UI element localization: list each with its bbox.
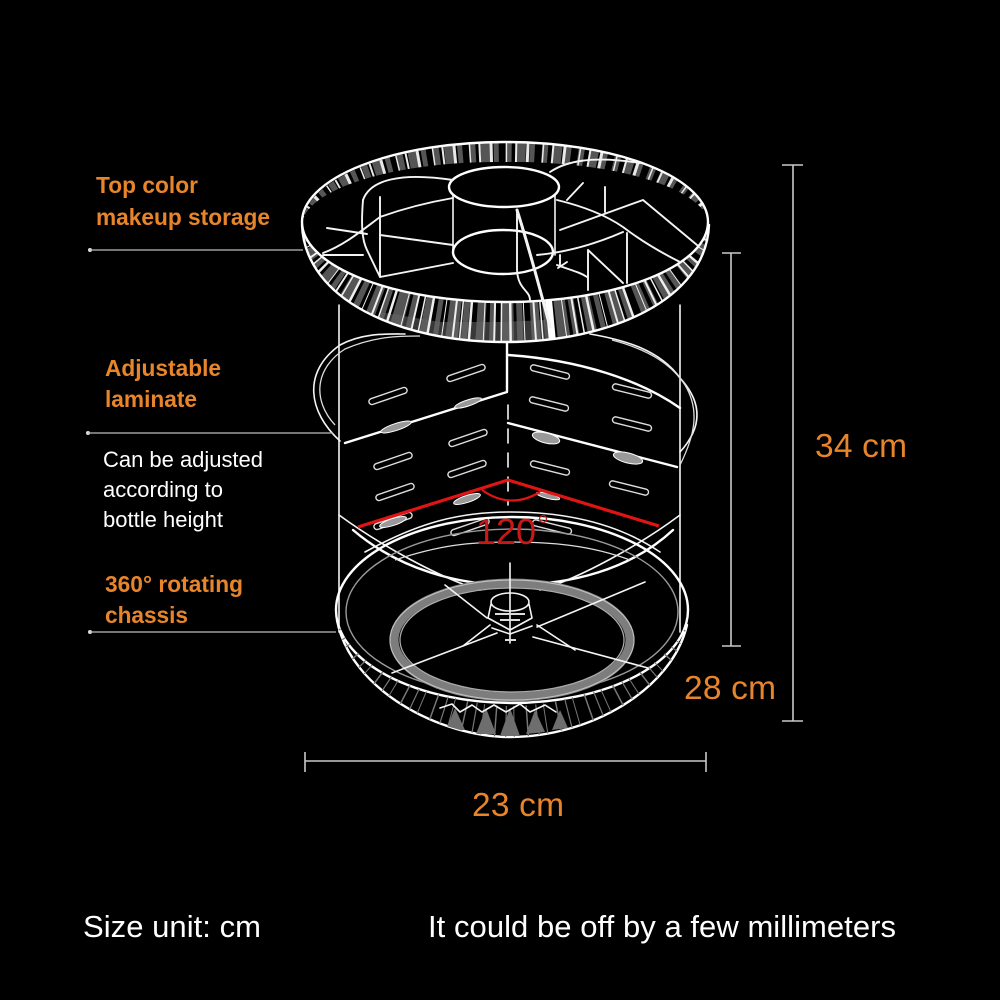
slot clips bbox=[379, 396, 644, 530]
panel: rotating chassis bbox=[330, 512, 695, 737]
callout: rotating chassis bbox=[88, 571, 336, 634]
central cylinder bbox=[449, 167, 559, 274]
spokes bbox=[392, 563, 648, 673]
dimension line: overall height bbox=[782, 165, 803, 721]
text block: laminate description: bottle height bbox=[103, 507, 223, 532]
dimension label 28 cm: 28 cm bbox=[684, 670, 776, 707]
middle tray arcs bbox=[314, 334, 697, 465]
base ellipses bbox=[336, 517, 688, 737]
callout: top color makeup storage: makeup storage bbox=[96, 204, 270, 230]
callout: adjustable laminate bbox=[86, 355, 333, 435]
panel: adjustable laminate bbox=[314, 334, 697, 536]
tray back rim texture bbox=[304, 143, 704, 218]
tray outlines bbox=[302, 142, 709, 342]
callout: rotating chassis: chassis bbox=[105, 602, 188, 628]
divider panel edges bbox=[345, 342, 680, 467]
text block: laminate description bbox=[103, 447, 263, 532]
text block: laminate description: according to bbox=[103, 477, 223, 502]
tray front rim texture bbox=[300, 225, 712, 342]
dimension line: body height bbox=[722, 253, 741, 646]
dimension line: diameter bbox=[305, 752, 706, 772]
base faceted rim bbox=[338, 628, 686, 737]
red 120 degree marker bbox=[358, 480, 659, 552]
dimension label 34 cm: 34 cm bbox=[815, 428, 907, 465]
footnote: tolerance: It could be off by a few millimeters bbox=[428, 909, 896, 944]
red 120 degree marker: 120 bbox=[476, 511, 536, 552]
compartment dividers bbox=[323, 160, 697, 327]
callout: top color makeup storage: Top color bbox=[96, 172, 198, 198]
lower tray front arcs bbox=[339, 512, 680, 590]
rotating ring bbox=[390, 580, 634, 700]
callout: adjustable laminate: Adjustable bbox=[105, 355, 221, 381]
callout: adjustable laminate: laminate bbox=[105, 386, 197, 412]
organizer body: frame and uprights bbox=[339, 305, 680, 632]
text block: laminate description: Can be adjusted bbox=[103, 447, 263, 472]
center hub bbox=[488, 593, 532, 640]
callout: top color makeup storage bbox=[88, 172, 303, 252]
dimension label 23 cm: 23 cm bbox=[472, 787, 564, 824]
panel: top makeup tray bbox=[300, 142, 712, 342]
callout: rotating chassis: 360° rotating bbox=[105, 571, 243, 597]
adjustment slots bbox=[368, 364, 652, 536]
footnote: size unit: Size unit: cm bbox=[83, 909, 261, 944]
